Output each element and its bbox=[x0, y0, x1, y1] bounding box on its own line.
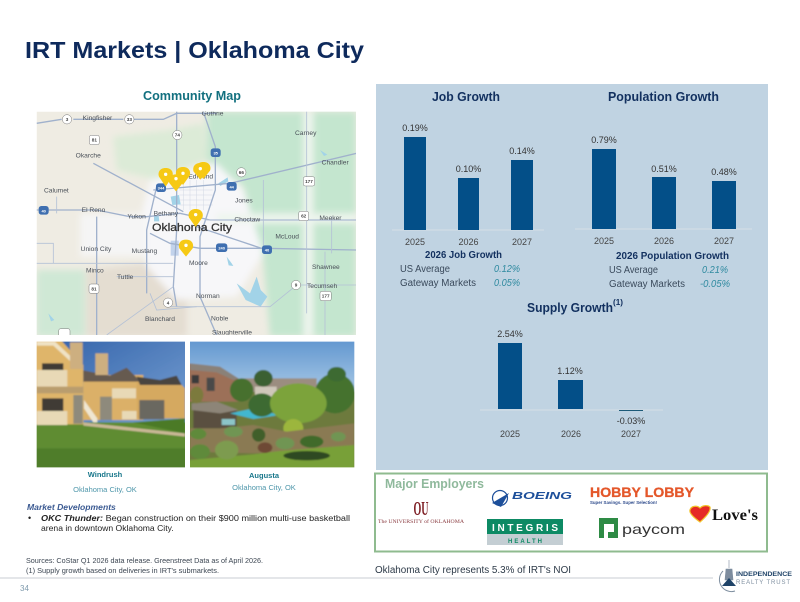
logo: University of Oklahoma: The UNIVERSITY of OKLAHOMA bbox=[378, 518, 464, 525]
bar chart: population growth: 2026 bbox=[654, 236, 674, 246]
logo: University of Oklahoma bbox=[378, 498, 464, 525]
city labels: Carney bbox=[295, 130, 317, 137]
highway and route shields: 74 bbox=[175, 133, 180, 138]
lakes bbox=[48, 150, 327, 321]
heading: community map: Community Map bbox=[143, 88, 241, 103]
logo: Integris Health: HEALTH bbox=[508, 539, 542, 545]
highway and route shields: 44 bbox=[229, 184, 235, 189]
bar chart: job growth: 2027 bbox=[512, 237, 532, 247]
heading: supply growth: (1) bbox=[613, 297, 623, 307]
caption: Windrush: Windrush bbox=[88, 470, 123, 479]
heading: major employers: Major Employers bbox=[385, 476, 484, 491]
heading: population growth: Population Growth bbox=[608, 89, 719, 104]
city labels: Oklahoma City bbox=[152, 222, 233, 234]
comparison: 2026 job growth: Gateway Markets bbox=[400, 278, 476, 289]
logo: Integris Health bbox=[487, 519, 563, 545]
comparison: 2026 job growth: 0.05% bbox=[494, 278, 520, 289]
highway and route shields: 33 bbox=[127, 117, 132, 122]
highway and route shields: 4 bbox=[167, 300, 170, 305]
page number: 34 bbox=[20, 584, 29, 593]
comparison: 2026 population growth bbox=[609, 251, 730, 290]
panel: major employers bbox=[375, 474, 767, 552]
footnotes bbox=[26, 556, 263, 575]
text block: market developments bbox=[27, 502, 350, 533]
photo: Augusta bbox=[187, 338, 358, 470]
highway and route shields: 66 bbox=[239, 170, 244, 175]
bar chart: supply growth: 1.12% bbox=[557, 366, 583, 376]
bar chart: job growth: 2026 bbox=[458, 237, 479, 247]
bar chart: supply growth: 2026 bbox=[561, 429, 581, 439]
bar chart: population growth: 2025 bbox=[594, 236, 614, 246]
bar chart: supply growth bbox=[480, 329, 663, 439]
bar chart: job growth bbox=[392, 123, 544, 247]
bar chart: job growth: 0.10% bbox=[456, 164, 481, 174]
comparison: 2026 population growth: Gateway Markets bbox=[609, 279, 685, 290]
bar chart: job growth: 0.19% bbox=[402, 123, 428, 133]
map pins bbox=[159, 162, 210, 257]
city labels: Norman bbox=[196, 293, 220, 300]
roads bbox=[37, 112, 217, 335]
highway and route shields bbox=[39, 115, 331, 338]
logo: Independence Realty Trust bbox=[719, 560, 792, 592]
logo: Hobby Lobby: Super Savings. Super Selection! bbox=[590, 500, 657, 505]
map: Oklahoma City region bbox=[37, 110, 357, 338]
caption: Windrush bbox=[73, 470, 137, 494]
panel: market growth charts bbox=[376, 84, 768, 470]
city labels: Calumet bbox=[44, 188, 69, 195]
logo: Love's: Love's bbox=[712, 507, 758, 524]
bar chart: population growth: 0.79% bbox=[591, 135, 617, 145]
city labels: Blanchard bbox=[145, 316, 175, 323]
city labels: McLoud bbox=[275, 234, 299, 241]
highway and route shields: 240 bbox=[218, 246, 226, 251]
bar chart: population growth: 2027 bbox=[714, 236, 734, 246]
comparison: 2026 job growth: US Average bbox=[400, 264, 450, 275]
caption: Windrush: Oklahoma City, OK bbox=[73, 485, 137, 494]
logo: Paycom bbox=[599, 518, 685, 538]
text block: market developments: • bbox=[28, 513, 31, 523]
caption: Augusta: Oklahoma City, OK bbox=[232, 483, 296, 492]
footnotes: (1) Supply growth based on deliveries in IRT's submarkets. bbox=[26, 566, 219, 575]
heading: job growth: Job Growth bbox=[432, 89, 500, 104]
logo: Boeing bbox=[492, 490, 572, 507]
text block: market developments: Market Developments bbox=[27, 502, 116, 512]
text block: market developments: OKC Thunder: Began construction on their $900 million multi-use basketball bbox=[41, 513, 350, 523]
bar chart: job growth: 2025 bbox=[405, 237, 425, 247]
city labels: Edmond bbox=[188, 173, 213, 180]
highway and route shields: 177 bbox=[322, 294, 330, 299]
city labels: Slaughterville bbox=[212, 330, 252, 337]
caption: Augusta: Augusta bbox=[249, 471, 280, 480]
comparison: 2026 job growth bbox=[400, 250, 520, 289]
logo: Hobby Lobby: HOBBY LOBBY bbox=[590, 484, 695, 500]
title: IRT Markets | Oklahoma City bbox=[25, 37, 364, 63]
bar chart: population growth: 0.51% bbox=[651, 164, 677, 174]
highway and route shields: 40 bbox=[41, 208, 47, 213]
footnotes: Sources: CoStar Q1 2026 data release. Greenstreet Data as of April 2026. bbox=[26, 556, 263, 565]
bar chart: job growth: 0.14% bbox=[509, 146, 535, 156]
highway and route shields: 81 bbox=[91, 286, 97, 291]
street grid bbox=[179, 180, 213, 210]
highway and route shields: 35 bbox=[213, 151, 219, 156]
highway and route shields: 40 bbox=[265, 248, 270, 253]
city labels: Meeker bbox=[319, 215, 342, 222]
city labels: Jones bbox=[235, 198, 253, 205]
city labels: Mustang bbox=[132, 248, 157, 255]
bar chart: supply growth: -0.03% bbox=[617, 416, 645, 426]
city labels: Shawnee bbox=[312, 264, 340, 271]
bar chart: population growth bbox=[575, 135, 752, 246]
highway and route shields: 3 bbox=[66, 117, 69, 122]
logo: Love's bbox=[690, 506, 758, 524]
logo: Integris Health: INTEGRIS bbox=[492, 523, 558, 534]
comparison: 2026 population growth: US Average bbox=[609, 265, 658, 276]
caption: Augusta bbox=[232, 471, 296, 492]
highway and route shields: 177 bbox=[305, 179, 313, 184]
comparison: 2026 population growth: 2026 Population Growth bbox=[616, 251, 729, 262]
city labels: Moore bbox=[189, 260, 208, 267]
comparison: 2026 population growth: 0.21% bbox=[702, 265, 728, 276]
comparison: 2026 job growth: 2026 Job Growth bbox=[425, 250, 502, 261]
city labels: Choctaw bbox=[234, 217, 260, 224]
city labels: El Reno bbox=[82, 207, 106, 214]
city labels: Kingfisher bbox=[83, 115, 113, 122]
bar chart: supply growth: 2025 bbox=[500, 429, 520, 439]
highway and route shields: 81 bbox=[92, 138, 97, 143]
bar chart: supply growth: 2.54% bbox=[497, 329, 523, 339]
city labels: Guthrie bbox=[202, 110, 224, 117]
logo: Boeing: BOEING bbox=[512, 491, 572, 502]
text block: market developments: arena in downtown Oklahoma City. bbox=[41, 523, 174, 533]
text: share of NOI: Oklahoma City represents 5.3% of IRT's NOI bbox=[375, 565, 571, 576]
highway and route shields: 62 bbox=[301, 214, 307, 219]
highway and route shields: 9 bbox=[295, 283, 298, 288]
city labels: Tuttle bbox=[117, 274, 134, 281]
city labels: Minco bbox=[86, 268, 104, 275]
bar chart: population growth: 0.48% bbox=[711, 167, 737, 177]
city labels: Okarche bbox=[76, 153, 101, 160]
city labels: Tecumseh bbox=[307, 283, 338, 290]
city labels: Yukon bbox=[127, 214, 146, 221]
city labels: Chandler bbox=[322, 160, 349, 167]
logo: Independence Realty Trust: REALTY TRUST bbox=[736, 580, 790, 586]
comparison: 2026 population growth: -0.05% bbox=[700, 279, 730, 290]
city labels: Noble bbox=[211, 315, 229, 322]
highway and route shields: 344 bbox=[158, 186, 165, 191]
logo: Paycom: paycom bbox=[622, 521, 685, 537]
bar chart: supply growth: 2027 bbox=[621, 429, 641, 439]
comparison: 2026 job growth: 0.12% bbox=[494, 264, 520, 275]
city labels bbox=[44, 110, 349, 337]
city labels: Union City bbox=[81, 246, 112, 253]
logo: Independence Realty Trust: INDEPENDENCE bbox=[736, 572, 792, 578]
photo: Windrush bbox=[33, 338, 188, 470]
city labels: Bethany bbox=[154, 211, 179, 218]
logo: University of Oklahoma: OU bbox=[414, 498, 428, 520]
heading: supply growth: Supply Growth bbox=[527, 300, 613, 315]
